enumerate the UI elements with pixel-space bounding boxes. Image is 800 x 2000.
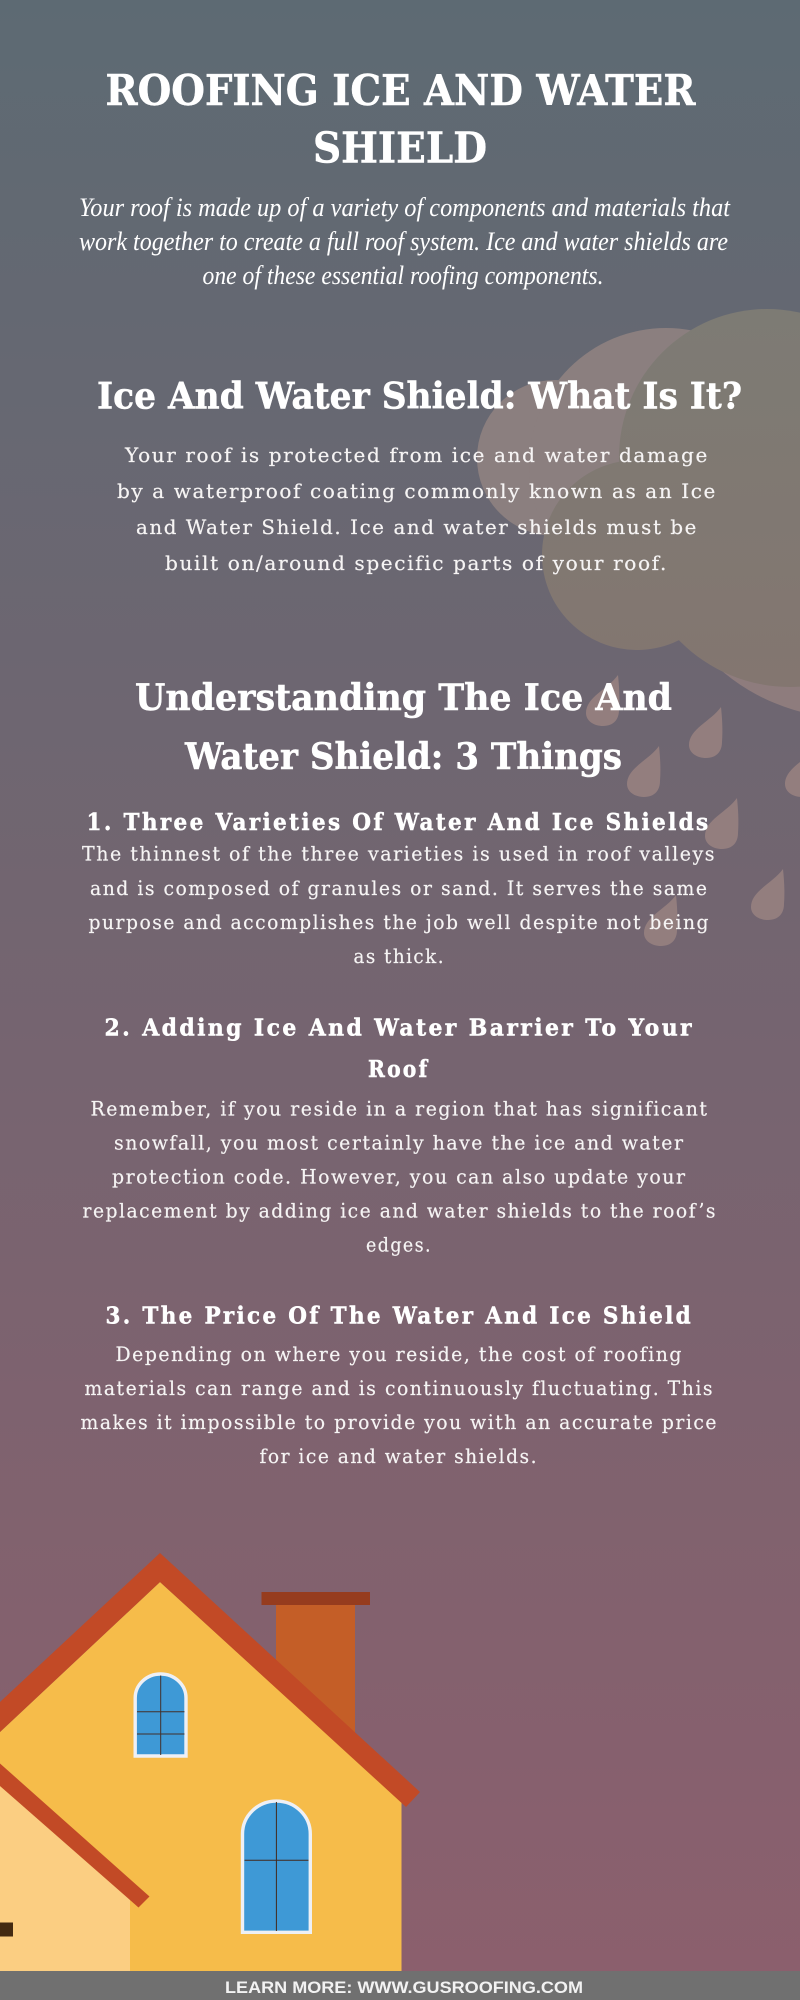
heading: what is it: Ice And Water Shield: What Is It? <box>97 376 742 418</box>
text block 2 <box>82 1096 717 1256</box>
text block 1: The thinnest of the three varieties is used in roof valleys <box>82 842 716 866</box>
text block 2: protection code. However, you can also update your <box>112 1164 686 1188</box>
main roof <box>0 1553 420 1807</box>
text block 2: replacement by adding ice and water shields to the roof’s <box>82 1198 717 1222</box>
title: SHIELD <box>313 124 487 172</box>
side wing roof <box>0 1764 150 1908</box>
text block 2: edges. <box>366 1232 432 1256</box>
subheading 2: Roof <box>368 1056 430 1083</box>
wing detail <box>0 1922 13 1936</box>
chimney <box>262 1592 370 1745</box>
text block 2: Remember, if you reside in a region that has significant <box>90 1096 708 1120</box>
text block 1: purpose and accomplishes the job well despite not being <box>88 910 710 934</box>
text block: what is it: and Water Shield. Ice and water shields must be <box>136 515 698 539</box>
text block 3: makes it impossible to provide you with an accurate price <box>80 1410 718 1434</box>
heading: 3 things: Water Shield: 3 Things <box>184 736 622 778</box>
illustration: house <box>0 1553 420 1971</box>
text block: what is it: Your roof is protected from ice and water damage <box>124 443 709 467</box>
small window <box>135 1674 186 1756</box>
title <box>106 66 696 172</box>
text block 3: materials can range and is continuously fluctuating. This <box>84 1376 714 1400</box>
house wall <box>0 1582 402 1971</box>
heading: 3 things: Understanding The Ice And <box>135 677 672 719</box>
heading: 3 things <box>135 677 672 778</box>
text block 1: as thick. <box>354 944 445 968</box>
text block: what is it: built on/around specific parts of your roof. <box>165 551 668 575</box>
large window <box>242 1801 310 1932</box>
text block 3 <box>80 1342 718 1468</box>
text block 1: and is composed of granules or sand. It serves the same <box>90 876 708 900</box>
text block 1 <box>82 842 716 968</box>
text block: what is it: by a waterproof coating commonly known as an Ice <box>117 479 717 503</box>
footer bar <box>0 1971 800 2000</box>
text block 2: snowfall, you most certainly have the ice and water <box>114 1130 684 1154</box>
icon: rain drops <box>586 675 800 946</box>
subheading 1: 1. Three Varieties Of Water And Ice Shields <box>86 809 710 836</box>
subheading 3: 3. The Price Of The Water And Ice Shield <box>106 1302 693 1330</box>
text block: what is it <box>117 443 717 575</box>
subheading 2: 2. Adding Ice And Water Barrier To Your <box>104 1014 694 1042</box>
icon: rain cloud <box>477 309 800 718</box>
title: ROOFING ICE AND WATER <box>106 66 696 115</box>
intro text <box>79 193 731 290</box>
intro text: work together to create a full roof system. Ice and water shields are <box>79 227 728 256</box>
footer text: LEARN MORE: WWW.GUSROOFING.COM <box>225 1978 583 1997</box>
side wing wall <box>0 1786 130 1971</box>
intro text: Your roof is made up of a variety of components and materials that <box>79 193 731 222</box>
text block 3: Depending on where you reside, the cost of roofing <box>116 1342 683 1366</box>
subheading 2 <box>104 1014 694 1083</box>
intro text: one of these essential roofing components. <box>202 261 604 290</box>
text block 3: for ice and water shields. <box>260 1444 538 1468</box>
